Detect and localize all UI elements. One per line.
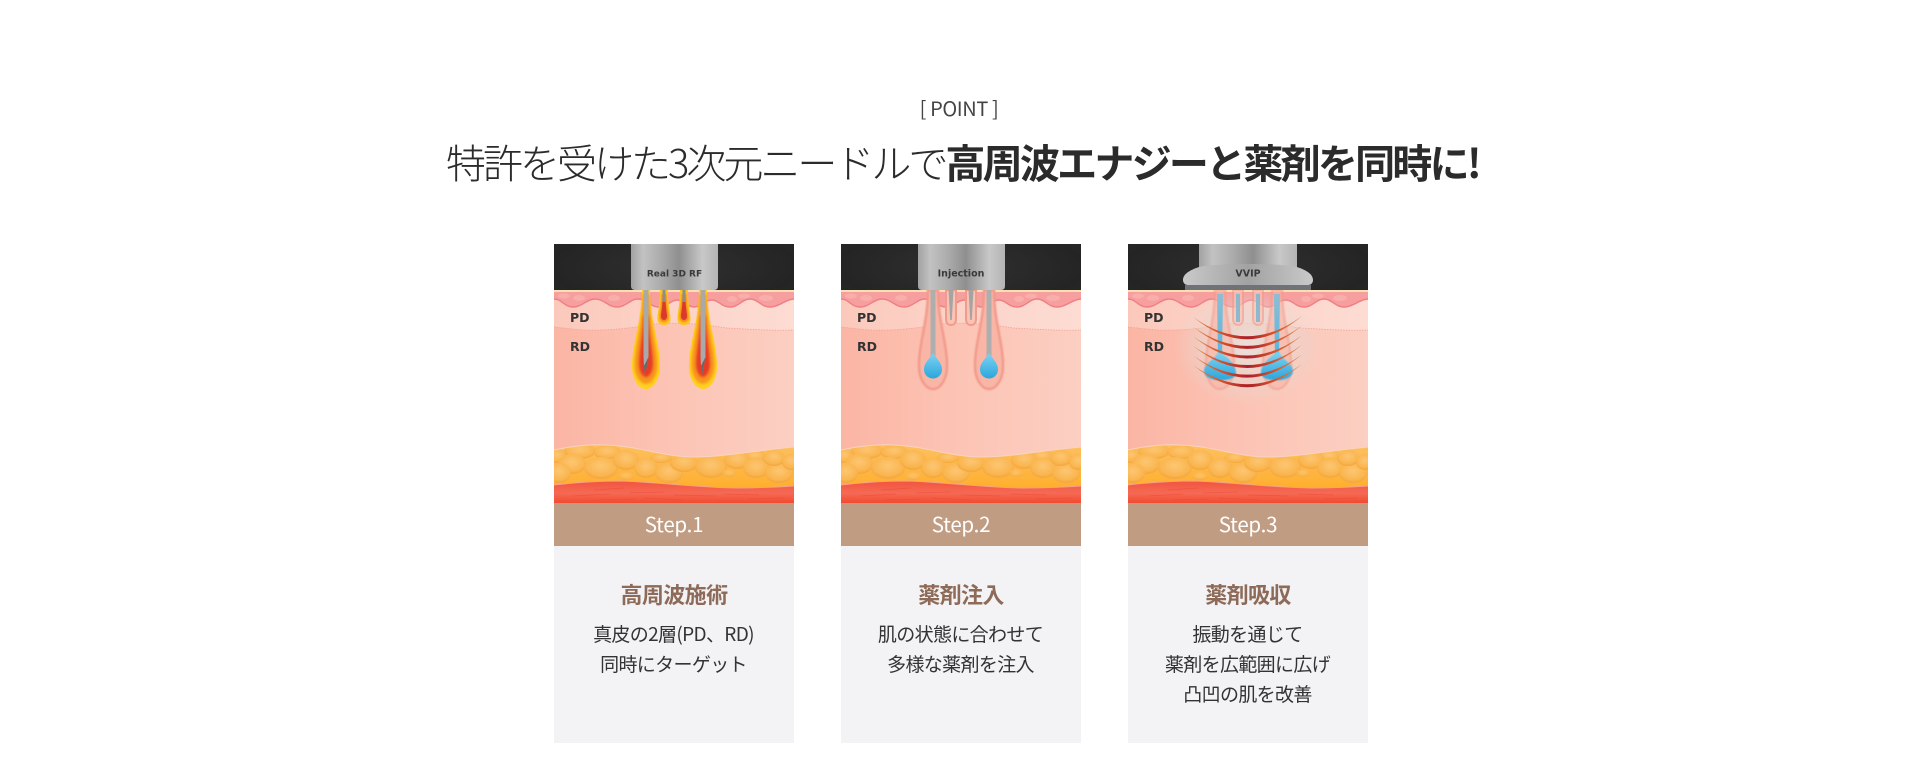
illustration: real 3D RF needles in skin: Real 3D RF	[647, 270, 702, 280]
illustration: VVIP vibration spreading drug: VVIP	[1235, 268, 1261, 280]
card description: 真皮の2層(PD、RD)	[593, 620, 754, 646]
step label: Step.3	[1219, 508, 1277, 538]
step label: Step.2	[932, 508, 990, 538]
section label: [ POINT ]	[920, 93, 998, 122]
card description: 薬剤を広範囲に広げ	[1165, 650, 1330, 676]
panel: step 1	[554, 244, 794, 743]
card heading: 薬剤注入	[918, 578, 1004, 610]
illustration: real 3D RF needles in skin: PD	[570, 310, 590, 325]
card heading: 薬剤吸収	[1205, 578, 1291, 610]
step label	[554, 503, 794, 546]
card heading: 高周波施術	[620, 578, 728, 610]
step label: Step.1	[645, 508, 703, 538]
card description: 同時にターゲット	[600, 650, 747, 676]
illustration: injection needles with drug droplets: PD	[857, 310, 877, 325]
card description: 多様な薬剤を注入	[887, 650, 1034, 676]
illustration: real 3D RF needles in skin: RD	[570, 339, 590, 354]
panel: step 3	[1128, 244, 1368, 743]
step label	[841, 503, 1081, 546]
card description: 振動を通じて	[1192, 620, 1303, 646]
illustration: VVIP vibration spreading drug: PD	[1144, 310, 1164, 325]
illustration: real 3D RF needles in skin	[554, 244, 794, 503]
card description: 肌の状態に合わせて	[878, 620, 1043, 646]
card description	[1165, 620, 1330, 706]
illustration: injection needles with drug droplets: RD	[857, 339, 877, 354]
card description	[878, 620, 1043, 676]
card description: 凸凹の肌を改善	[1183, 680, 1312, 706]
illustration: injection needles with drug droplets: Injection	[938, 268, 985, 280]
panel: step 2	[841, 244, 1081, 743]
card description	[593, 620, 754, 676]
illustration: VVIP vibration spreading drug: RD	[1144, 339, 1164, 354]
illustration: VVIP vibration spreading drug	[1128, 244, 1368, 503]
illustration: injection needles with drug droplets	[841, 244, 1081, 503]
title: 特許を受けた3次元ニードルで高周波エナジーと薬剤を同時に!	[446, 132, 1479, 190]
step label	[1128, 503, 1368, 546]
